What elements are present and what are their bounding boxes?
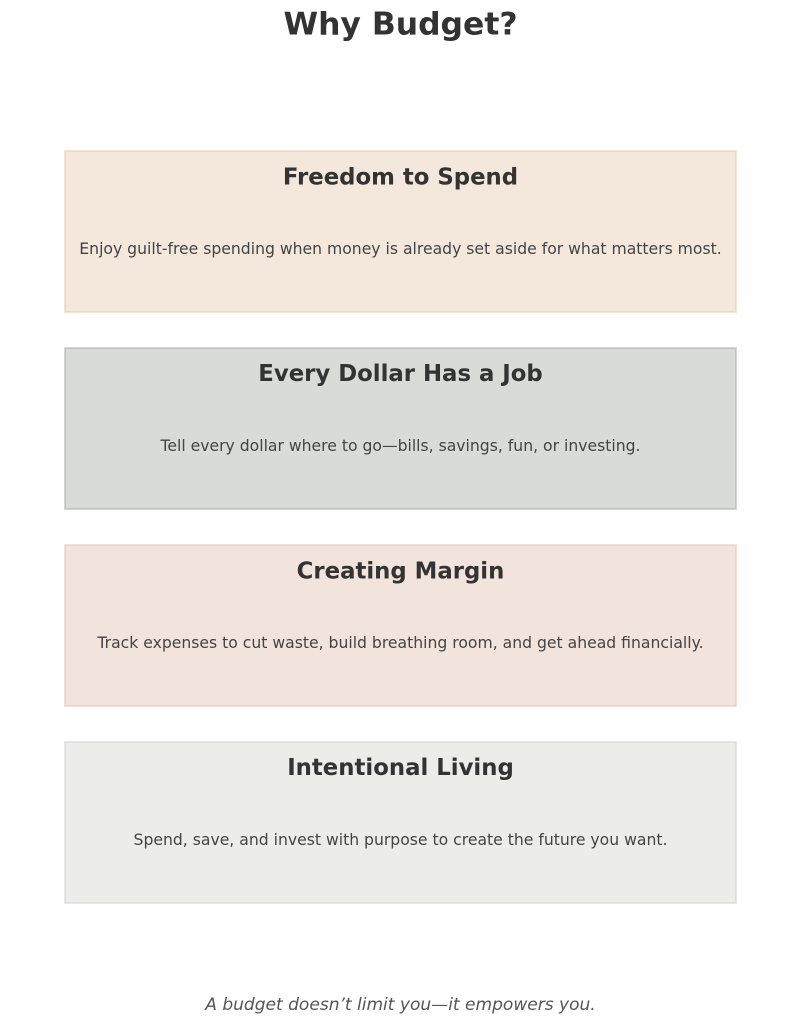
heading: Freedom to Spend: Freedom to Spend: [283, 164, 518, 190]
heading: Every Dollar Has a Job: Every Dollar Has a Job: [258, 361, 543, 387]
panel: Freedom to Spend: [65, 151, 736, 312]
panel: Every Dollar Has a Job: [65, 348, 736, 509]
panel background: Creating Margin: [65, 545, 736, 706]
heading: Creating Margin: Creating Margin: [297, 558, 504, 584]
heading: Intentional Living: Intentional Living: [287, 755, 514, 781]
text: Intentional Living description: Spend, save, and invest with purpose to create the future you want.: [134, 830, 667, 849]
panel background: Intentional Living: [65, 742, 736, 903]
text: Freedom to Spend description: Enjoy guilt-free spending when money is already set aside for what matters most.: [79, 239, 722, 258]
footer tagline: A budget doesn’t limit you—it empowers you.: [204, 995, 596, 1015]
panel background: Every Dollar Has a Job: [65, 348, 736, 509]
panel: Creating Margin: [65, 545, 736, 706]
panel background: Freedom to Spend: [65, 151, 736, 312]
text: Creating Margin description: Track expenses to cut waste, build breathing room, and get ahead financially.: [96, 633, 704, 652]
title: Why Budget?: [283, 6, 518, 42]
text: Every Dollar Has a Job description: Tell every dollar where to go—bills, savings, fun, or investing.: [159, 436, 641, 455]
panel: Intentional Living: [65, 742, 736, 903]
